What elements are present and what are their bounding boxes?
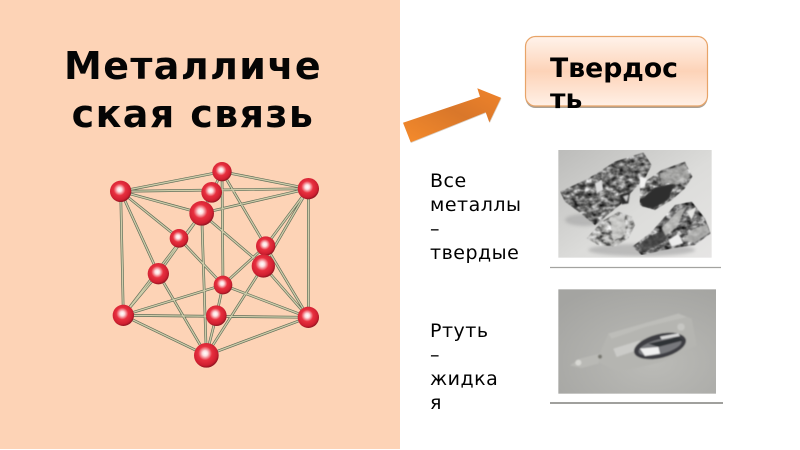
title: ская связь bbox=[72, 92, 314, 136]
text: all metals are solid: металлы bbox=[430, 194, 522, 216]
divider line under second photo bbox=[550, 402, 723, 404]
diagram: metallic crystal lattice bbox=[110, 36, 723, 404]
photo: mercury in glass ampoule bbox=[558, 289, 716, 394]
button: hardness bbox=[526, 36, 708, 108]
title bbox=[64, 44, 322, 136]
panel: left peach background bbox=[0, 0, 400, 449]
text: all metals are solid: твердые bbox=[430, 242, 519, 264]
button label: Твердос bbox=[550, 53, 678, 84]
text: all metals are solid bbox=[430, 170, 522, 264]
button label: ть bbox=[550, 84, 582, 115]
title: Металличе bbox=[64, 44, 322, 88]
text: mercury is liquid bbox=[430, 320, 498, 414]
text: mercury is liquid: – bbox=[430, 344, 440, 366]
text: mercury is liquid: я bbox=[430, 392, 442, 414]
text: mercury is liquid: жидка bbox=[430, 368, 498, 390]
text: all metals are solid: – bbox=[430, 218, 440, 240]
button label bbox=[550, 53, 678, 115]
text: all metals are solid: Все bbox=[430, 170, 467, 192]
text: mercury is liquid: Ртуть bbox=[430, 320, 489, 342]
photo: solid metal pieces bbox=[558, 150, 712, 258]
lattice atoms bbox=[110, 162, 319, 368]
arrow bbox=[403, 88, 502, 143]
lattice bonds bbox=[121, 172, 308, 355]
divider line under first photo bbox=[550, 266, 721, 268]
